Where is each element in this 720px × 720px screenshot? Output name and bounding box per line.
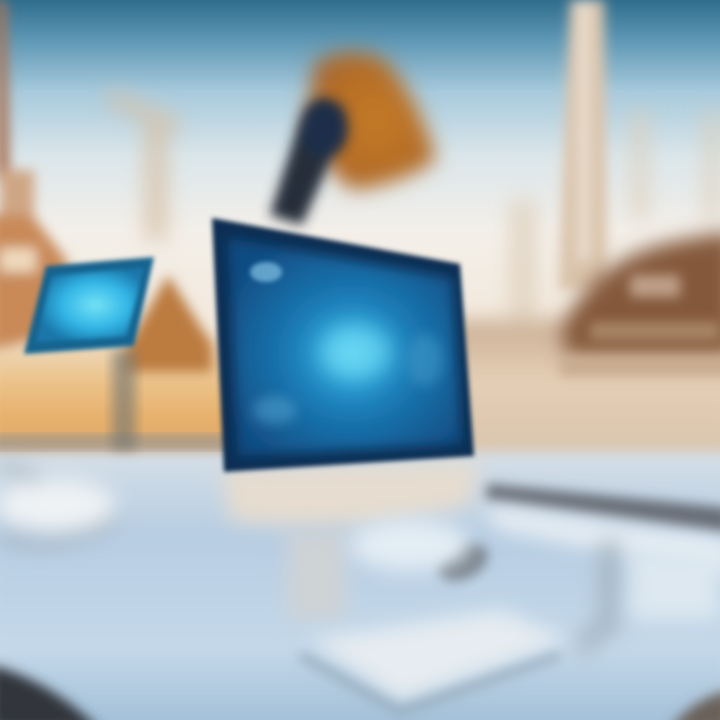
monitor stand neck <box>288 530 346 620</box>
dark corner bottom left <box>0 665 100 720</box>
dark corner bottom right <box>670 690 720 720</box>
monitor bezel <box>212 218 474 472</box>
left buildings <box>0 0 212 372</box>
desk horizon shadow left <box>0 436 230 448</box>
right desk panel <box>630 550 720 620</box>
right stand on desk <box>575 540 622 660</box>
left crane silhouettes <box>106 88 180 240</box>
screen glow <box>319 324 391 380</box>
monitor stand reflection under screen <box>222 462 480 525</box>
central tower on the right <box>558 0 608 290</box>
main monitor <box>212 218 474 472</box>
screen detail top left <box>250 262 282 282</box>
monitor screen <box>228 238 462 456</box>
lamp arm <box>270 98 348 225</box>
desk surface <box>0 452 720 720</box>
right building details <box>560 275 720 376</box>
right buildings <box>562 232 720 355</box>
mouse shadow <box>433 537 493 587</box>
pale band under the edge at right <box>480 505 720 575</box>
ground band left <box>0 335 290 460</box>
screen detail bottom left <box>253 396 297 424</box>
distant cranes right <box>510 110 720 330</box>
lamp shade <box>305 51 436 190</box>
small left monitor stand <box>112 350 136 450</box>
screen detail right <box>407 334 443 386</box>
bright desk patch <box>350 519 470 571</box>
desk objects left <box>0 465 118 542</box>
small left monitor <box>24 257 154 354</box>
ground band right <box>440 320 720 490</box>
keyboard on desk <box>310 610 570 702</box>
keyboard shadow <box>300 655 560 712</box>
sky background <box>0 0 720 460</box>
dark keyboard edge at right <box>486 484 720 534</box>
